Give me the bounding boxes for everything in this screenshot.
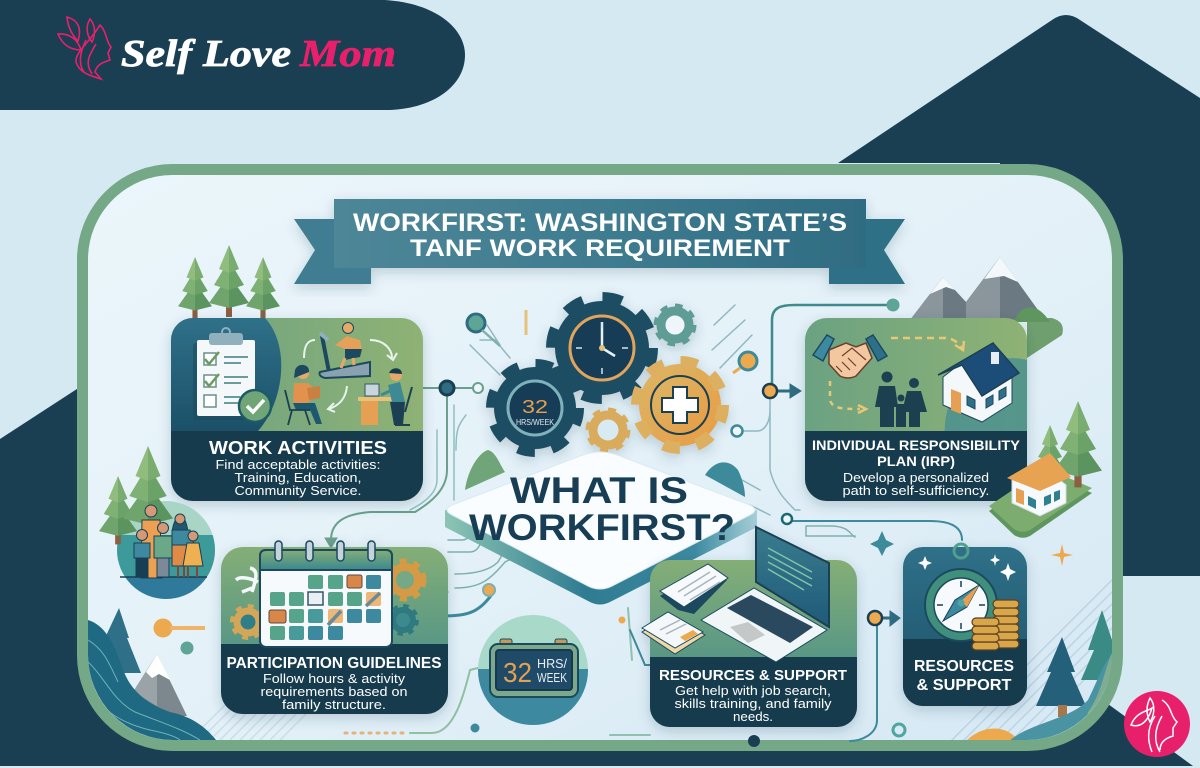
icon: house — [938, 343, 1019, 422]
hatching — [202, 704, 307, 740]
family circle — [99, 446, 215, 601]
gear: clock — [553, 299, 651, 397]
digital clock: WEEK — [537, 670, 567, 685]
caption band — [171, 431, 423, 501]
logo mark white — [1131, 698, 1177, 752]
ribbon body — [334, 199, 866, 268]
logo banner — [0, 0, 465, 110]
snowy mountain — [133, 654, 187, 716]
icon: coin stacks — [972, 600, 1019, 650]
participation caption: requirements based on — [260, 685, 408, 699]
diamond heading: WHAT IS — [510, 470, 688, 511]
panel: participation guidelines — [221, 541, 448, 714]
irp caption: path to self-sufficiency. — [842, 484, 990, 498]
arrows: activity cycle — [304, 340, 397, 412]
circuit connector lines — [325, 305, 962, 741]
dark mountain background left and bottom — [0, 387, 1193, 766]
hatching — [950, 574, 1118, 742]
icon: form with highlight — [642, 612, 705, 654]
icon: clipboard checklist — [193, 328, 271, 422]
work activities caption: Training, Education, — [234, 471, 362, 485]
participation caption: Follow hours & activity — [263, 672, 406, 686]
caption band — [650, 657, 857, 727]
logo icon: woman and leaves — [58, 17, 111, 79]
participation caption: PARTICIPATION GUIDELINES — [226, 655, 442, 672]
work activities caption: Community Service. — [234, 484, 362, 498]
center diamond: what is workfirst — [445, 452, 757, 604]
work activities caption: Find acceptable activities: — [216, 458, 380, 472]
family figures — [134, 505, 203, 578]
icon: family silhouette — [875, 372, 927, 427]
resources caption: Get help with job search, — [675, 684, 831, 698]
resources caption: RESOURCES & SUPPORT — [659, 667, 847, 684]
icon: compass — [925, 544, 997, 641]
bottom-right house on platform — [989, 401, 1102, 538]
top-right mountains — [910, 257, 1063, 358]
icon: calendar — [260, 541, 392, 647]
center diamond: what is workfirst: WORKFIRST? — [469, 507, 735, 548]
icon: laptop — [701, 527, 829, 662]
compass caption: RESOURCES — [914, 658, 1014, 675]
gear: plus — [637, 362, 723, 448]
tree — [106, 608, 141, 673]
logo banner: Mom — [299, 33, 396, 75]
center side decorations — [465, 310, 745, 497]
participation caption: family structure. — [282, 698, 386, 712]
bottom-left landscape — [88, 608, 310, 740]
irp caption: PLAN (IRP) — [877, 453, 955, 469]
resources caption — [659, 667, 847, 724]
irp caption: Develop a personalized — [843, 471, 989, 485]
trees — [1036, 637, 1086, 706]
dashed arrows — [830, 338, 964, 413]
left gear icons — [232, 568, 264, 638]
resources caption: skills training, and family — [674, 697, 832, 711]
teal curved panel — [171, 318, 281, 431]
panel: work activities — [171, 318, 423, 501]
calendar icons — [347, 575, 362, 588]
resources caption: needs. — [733, 710, 773, 724]
bottom-right landscape — [950, 574, 1118, 745]
pink logo badge — [1124, 691, 1190, 757]
icon: person reading — [285, 365, 322, 425]
gear: 32 hrs/week — [492, 365, 578, 451]
orange pin decoration — [154, 618, 205, 654]
panel: resources and support compass — [903, 544, 1027, 706]
work activities caption: WORK ACTIVITIES — [209, 438, 387, 458]
icon: stacked documents — [660, 564, 728, 614]
caption band — [903, 639, 1027, 706]
compass caption: & SUPPORT — [916, 677, 1012, 694]
panel: individual responsibility plan — [805, 318, 1027, 501]
irp caption: INDIVIDUAL RESPONSIBILITY — [812, 437, 1021, 453]
dark mountain background top right — [838, 15, 1200, 576]
river hills — [88, 620, 216, 740]
green hill platform — [1027, 318, 1063, 358]
gear: 32 hrs/week: HRS/WEEK — [516, 418, 555, 427]
right gear icons — [386, 561, 424, 634]
sparkles in compass card — [918, 554, 1016, 581]
top-left trees — [178, 245, 280, 318]
digital clock: 32 — [503, 657, 532, 688]
calendar day cells — [270, 575, 381, 640]
small house — [1012, 470, 1066, 516]
panel: resources and support laptop — [642, 527, 857, 727]
digital clock: HRS/ — [537, 656, 567, 671]
left ribbon tail — [294, 219, 371, 284]
icon: person at desk — [358, 368, 412, 425]
caption band — [805, 431, 1027, 501]
trees behind house — [1034, 425, 1066, 483]
right ribbon tail — [829, 219, 905, 284]
sun — [967, 728, 1015, 740]
main infographic frame — [82, 170, 1118, 746]
gear: 32 hrs/week: 32 — [522, 397, 548, 417]
small gold gear — [588, 410, 628, 450]
sparkles — [870, 531, 1073, 566]
title ribbon: TANF WORK REQUIREMENT — [410, 235, 790, 262]
hills — [1010, 656, 1112, 740]
digital clock — [490, 639, 578, 697]
title ribbon — [294, 199, 905, 284]
small teal gear — [656, 306, 694, 344]
participation caption — [226, 655, 442, 712]
connector nodes — [436, 298, 905, 747]
icon: handshake — [813, 335, 887, 378]
irp caption — [812, 437, 1021, 498]
center gears cluster — [492, 299, 723, 451]
title text: WORKFIRST: WASHINGTON STATE’S — [353, 209, 847, 237]
work activities caption — [209, 438, 387, 498]
trees beside family — [99, 476, 137, 544]
32 hrs per week circle — [478, 615, 588, 726]
logo wordmark: Self Love — [121, 33, 291, 75]
compass caption — [914, 658, 1014, 694]
caption band — [221, 644, 448, 714]
icon: treadmill person — [320, 322, 370, 378]
